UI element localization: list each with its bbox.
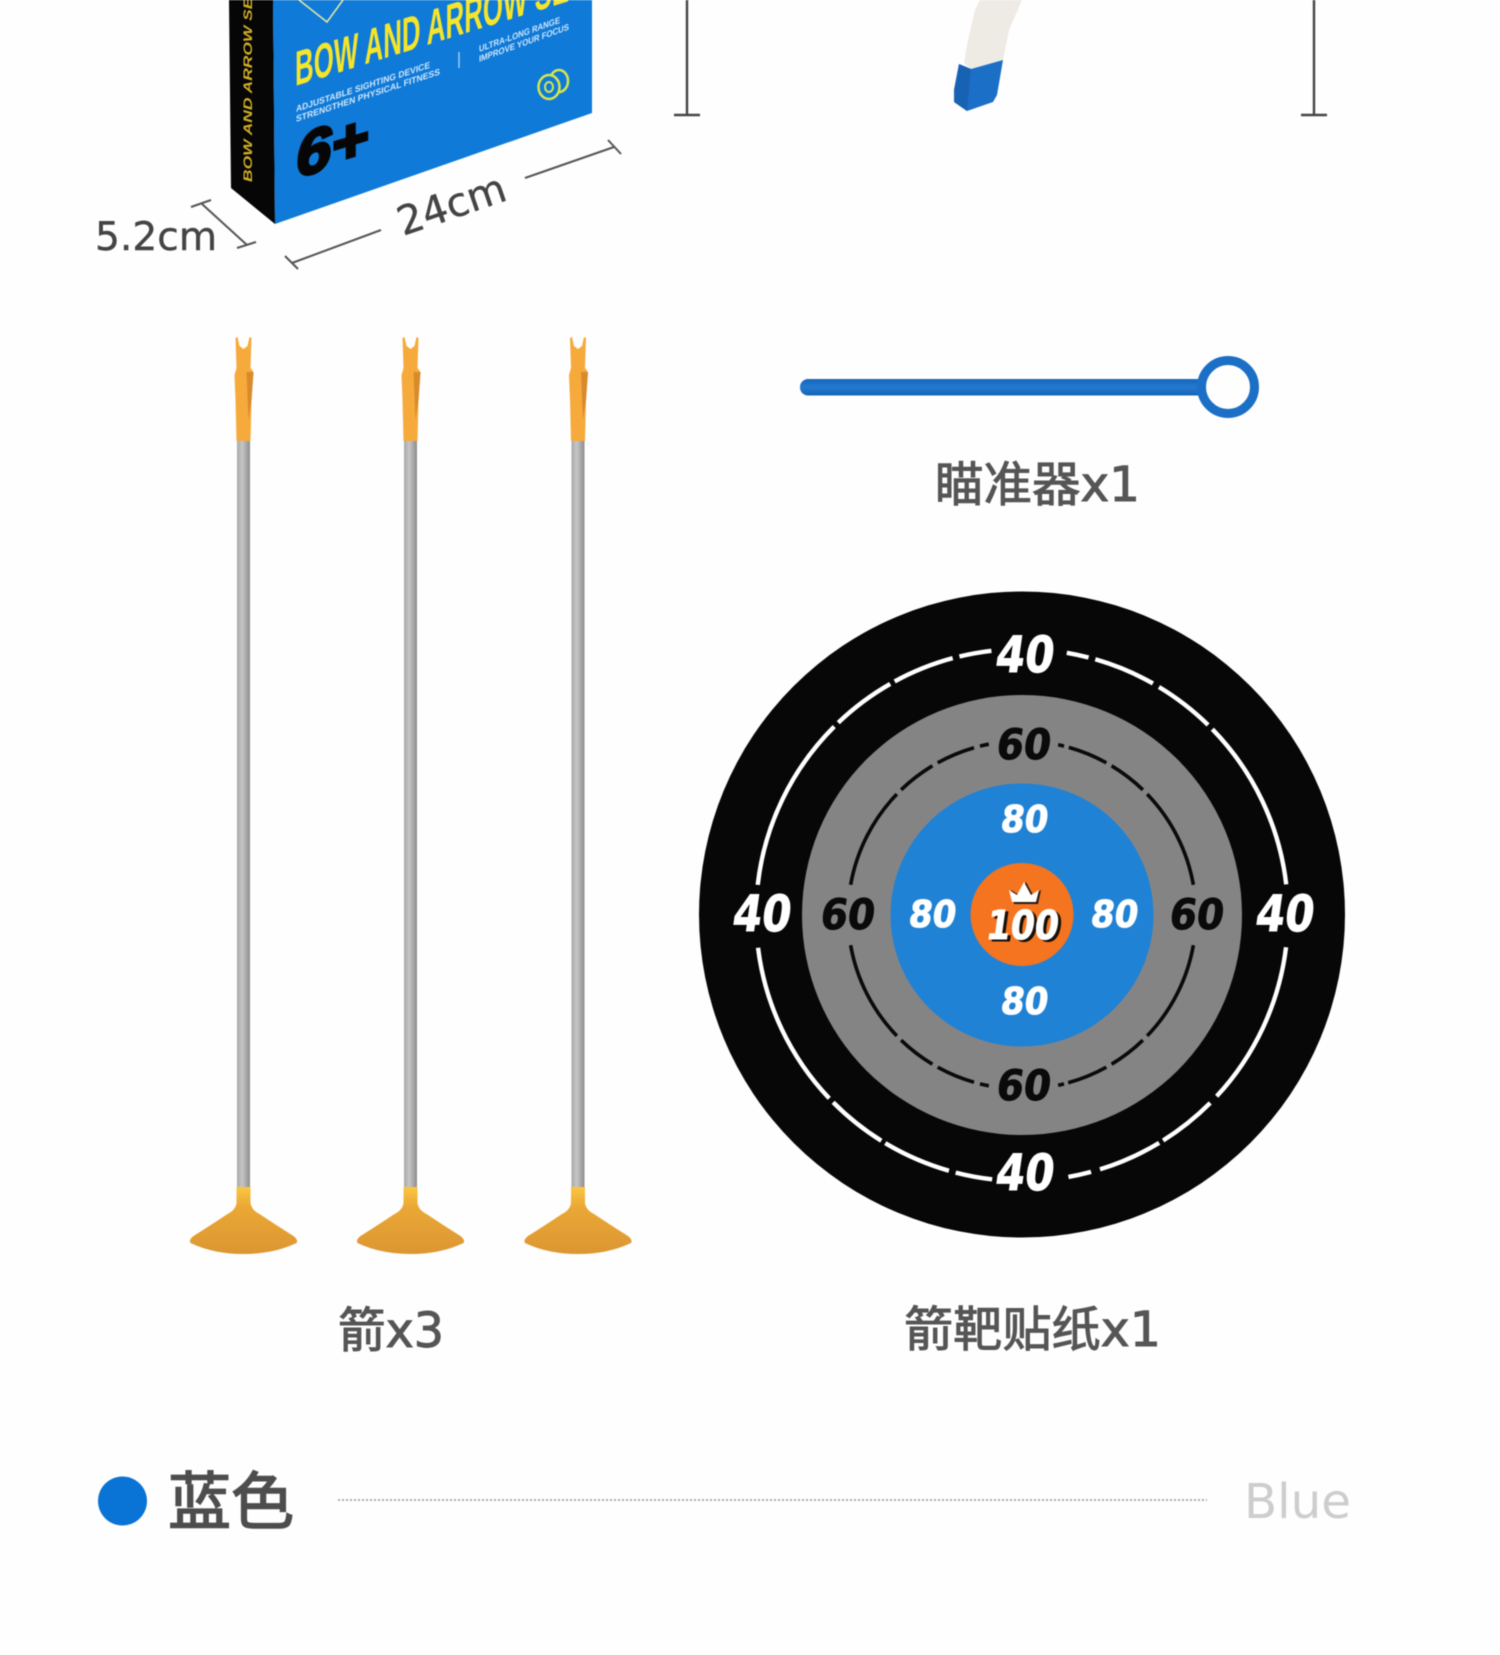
dimension: box width 24cm [285,140,621,269]
arrow 3 [524,337,632,1254]
box front artwork [296,0,570,177]
ring: blue 80 [890,784,1154,1046]
score labels 40: 40 [1252,884,1319,943]
score labels 60 [818,720,1227,1110]
ring: white dashes [756,649,1288,1181]
score labels 80 [906,797,1141,1023]
box front artwork: ULTRA-LONG RANGE [479,15,560,54]
box front face [273,0,592,224]
score labels 40: 40 [992,1143,1059,1202]
score labels 60: 60 [994,1061,1054,1110]
ring: black outer 40 [699,592,1345,1238]
bullseye: orange 100 [970,863,1074,966]
icon: colour dot [98,1476,147,1526]
colour row: blue [98,1452,1351,1543]
score labels 60: 60 [1167,890,1227,939]
arrow 1 [190,337,297,1254]
score label 100: 100 [987,905,1065,951]
score labels 60: 60 [818,890,878,939]
score labels 80: 80 [998,979,1051,1023]
label: arrows x3: 箭x3 [338,1303,444,1359]
colour name: 蓝色 [168,1452,294,1543]
box front artwork: ADJUSTABLE SIGHTING DEVICE [296,60,430,114]
label: sight x1: 瞄准器x1 [935,457,1140,513]
score labels 40 [729,625,1319,1202]
ring: grey 60 [802,695,1242,1135]
bow limb with blue tip [954,0,1022,111]
dimension line: right bow bracket [1301,0,1327,115]
label: target sticker x1: 箭靶贴纸x1 [904,1302,1161,1358]
score label 100: 100 [984,903,1062,949]
box front artwork: 6+ [296,102,368,192]
arrow 2 [357,337,464,1254]
score labels 80: 80 [906,892,959,936]
icon: crown [1009,882,1041,904]
product box [229,0,592,224]
colour name in English: Blue [1244,1474,1351,1530]
dimension: box depth 5.2cm: 5.2cm [95,215,217,260]
box side face [229,0,275,224]
ring: black dashes [848,741,1196,1089]
score labels 60: 60 [994,720,1054,769]
score labels 80: 80 [1088,892,1141,936]
dimension: box width 24cm: 24cm [391,165,512,245]
dimension: box depth 5.2cm [95,200,256,260]
box front artwork: IMPROVE YOUR FOCUS [479,22,569,64]
score labels 40: 40 [992,625,1059,684]
dotted divider [338,1499,1207,1501]
target sticker [699,592,1345,1238]
icon: sight [800,360,1254,414]
dimension line: left bow bracket [674,0,700,115]
box side text: BOW AND ARROW SET [241,0,255,182]
box front artwork: STRENGTHEN PHYSICAL FITNESS [296,67,440,124]
score labels 40: 40 [729,884,796,943]
score labels 80: 80 [998,797,1051,841]
